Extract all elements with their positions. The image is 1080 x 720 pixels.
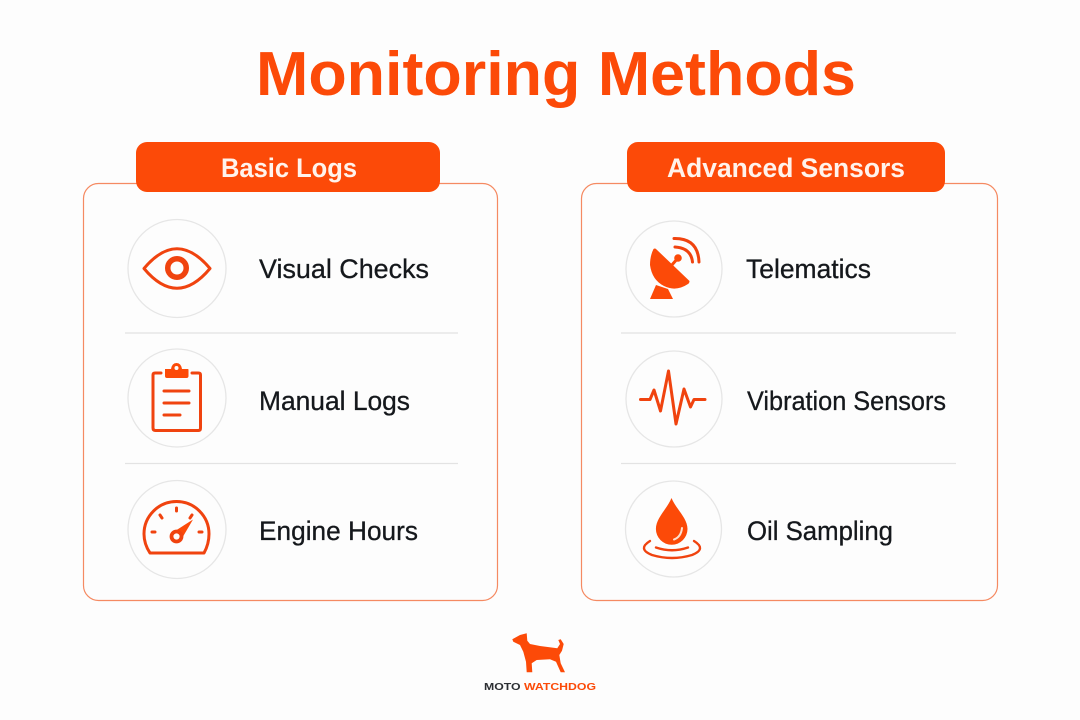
heading tab: advanced sensors — [627, 142, 945, 192]
icon: dog silhouette — [512, 633, 565, 672]
heading tab: basic logs: Basic Logs — [221, 153, 357, 183]
panel frame — [84, 184, 498, 600]
logo: moto watchdog — [484, 633, 596, 693]
icon: satellite dish — [626, 221, 722, 317]
label: oil sampling: Oil Sampling — [747, 516, 893, 546]
icon: eye — [128, 220, 226, 318]
heading tab: basic logs — [136, 142, 440, 192]
panel: basic logs — [84, 142, 498, 600]
icon: gauge — [128, 480, 226, 578]
icon: clipboard — [128, 349, 226, 447]
panel frame — [582, 184, 998, 600]
icon: oil drop — [626, 481, 722, 577]
icon: vibration waveform — [626, 351, 722, 447]
label: vibration sensors: Vibration Sensors — [747, 386, 946, 416]
panel: advanced sensors — [582, 142, 998, 600]
wordmark: MOTO WATCHDOG — [484, 681, 596, 693]
label: telematics: Telematics — [746, 254, 871, 284]
label: engine hours: Engine Hours — [259, 516, 418, 546]
title: Monitoring Methods — [256, 40, 856, 109]
heading tab: advanced sensors: Advanced Sensors — [667, 153, 905, 183]
label: visual checks: Visual Checks — [259, 254, 429, 284]
label: manual logs: Manual Logs — [259, 386, 410, 416]
